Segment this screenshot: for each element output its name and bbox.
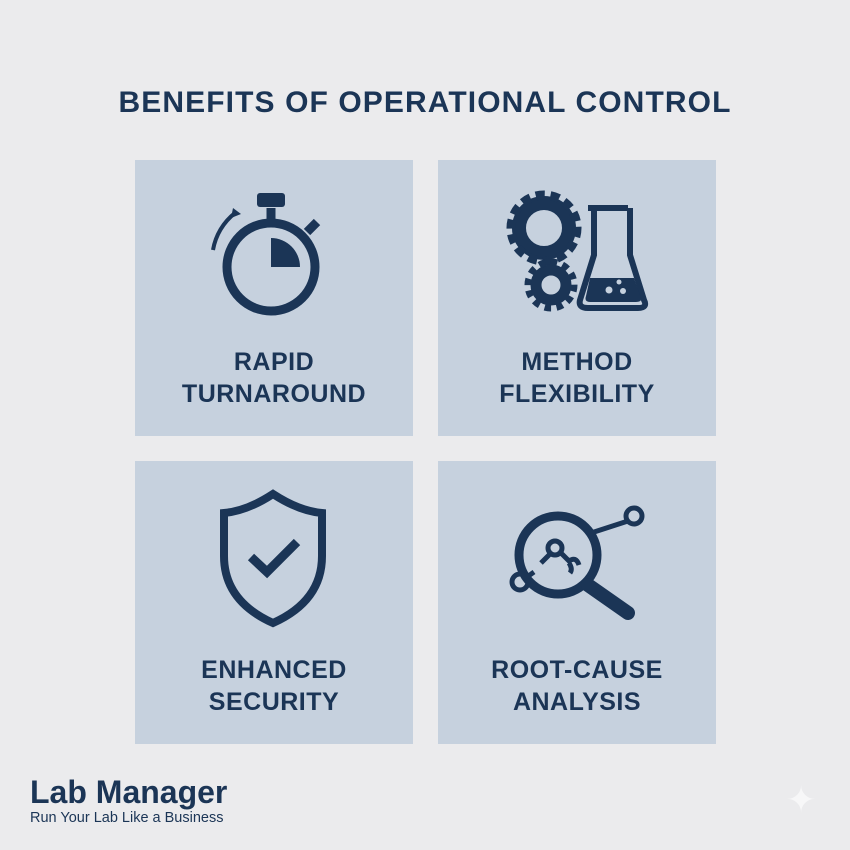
label: METHOD (521, 348, 633, 376)
label (201, 656, 347, 716)
label: ENHANCED (201, 656, 347, 684)
label: RAPID (234, 348, 314, 376)
icon: shield (220, 489, 326, 628)
panel: enhanced security (135, 461, 413, 744)
icon: gears and flask (506, 190, 648, 312)
label: SECURITY (209, 688, 339, 716)
logo: Lab Manager (30, 774, 227, 810)
icon: magnifier (510, 506, 644, 620)
icon: stopwatch (211, 193, 320, 316)
icon: sparkle: ✦ (786, 779, 816, 820)
title: BENEFITS OF OPERATIONAL CONTROL (118, 86, 732, 119)
logo: Run Your Lab Like a Business (30, 810, 223, 826)
label (499, 348, 655, 408)
label (491, 656, 663, 716)
label (182, 348, 366, 408)
label: ROOT-CAUSE (491, 656, 663, 684)
panel: method flexibility (438, 160, 716, 436)
panel: root-cause analysis (438, 461, 716, 744)
panel: rapid turnaround (135, 160, 413, 436)
label: FLEXIBILITY (499, 380, 655, 408)
label: TURNAROUND (182, 380, 366, 408)
logo (30, 774, 227, 826)
label: ANALYSIS (513, 688, 641, 716)
